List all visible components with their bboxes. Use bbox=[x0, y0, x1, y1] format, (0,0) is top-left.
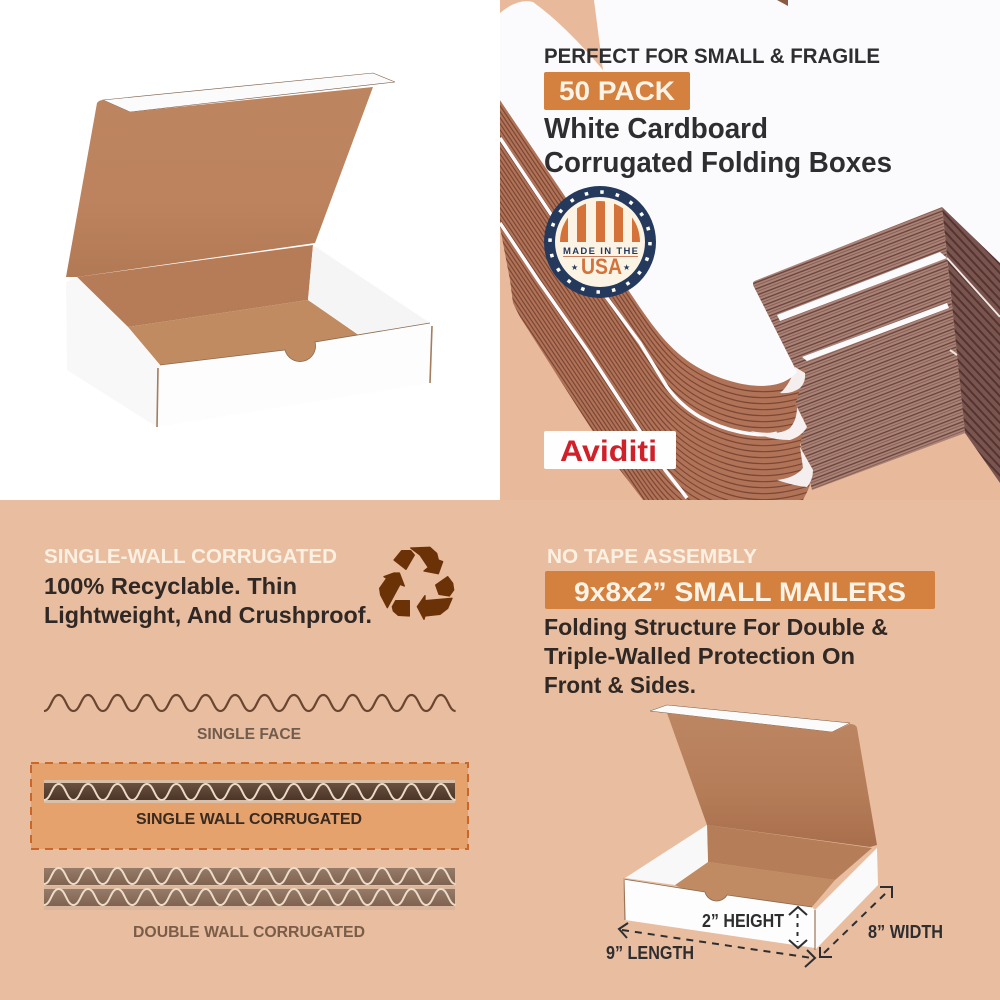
heading: perfect for small and fragile: PERFECT FOR SMALL & FRAGILE bbox=[544, 45, 880, 68]
image: open white mailer box bbox=[66, 73, 433, 427]
heading: no tape assembly: NO TAPE ASSEMBLY bbox=[547, 546, 758, 568]
diagram: single face wave bbox=[44, 695, 456, 711]
diagram: double wall cross-section bbox=[44, 868, 456, 910]
callout: single wall corrugated highlight bbox=[31, 763, 468, 849]
logo: aviditi: Aviditi bbox=[560, 435, 657, 468]
text: folding structure description: Front & Sides. bbox=[544, 672, 696, 698]
text: recyclable description: Lightweight, And Crushproof. bbox=[44, 602, 372, 628]
icon: recycle bbox=[380, 547, 454, 619]
title: white cardboard corrugated folding boxes bbox=[544, 113, 892, 179]
text: recyclable description: 100% Recyclable. Thin bbox=[44, 573, 297, 599]
text: recyclable description bbox=[44, 573, 372, 628]
panel: single wall corrugated bbox=[0, 500, 500, 1000]
icon: made in the usa seal bbox=[544, 186, 656, 298]
panel: product photo top left bbox=[0, 0, 500, 500]
arrow: length bbox=[619, 923, 815, 967]
panel: stacked boxes top right bbox=[500, 0, 1000, 500]
icon: made in the usa seal: ★ bbox=[571, 263, 578, 272]
label: single wall corrugated: SINGLE WALL CORRUGATED bbox=[136, 811, 362, 828]
banner: small mailers size: 9x8x2” SMALL MAILERS bbox=[574, 577, 906, 607]
label: width: 8” WIDTH bbox=[868, 922, 943, 942]
image: top white sheet bbox=[500, 60, 797, 386]
image: open box with dimensions bbox=[623, 705, 878, 950]
diagram: single wall cross-section bbox=[44, 780, 456, 803]
icon: made in the usa seal: ★ bbox=[623, 263, 630, 272]
logo: aviditi bbox=[544, 431, 676, 469]
panel: size details bbox=[500, 500, 1000, 1000]
text: folding structure description: Folding Structure For Double & bbox=[544, 614, 888, 640]
badge: 50 pack bbox=[544, 72, 690, 110]
label: double wall corrugated: DOUBLE WALL CORRUGATED bbox=[133, 924, 365, 941]
image: stack left side bbox=[500, 100, 814, 500]
text: folding structure description bbox=[544, 614, 888, 698]
badge: 50 pack: 50 PACK bbox=[559, 76, 676, 106]
label: single face: SINGLE FACE bbox=[197, 726, 301, 743]
title: white cardboard corrugated folding boxes: Corrugated Folding Boxes bbox=[544, 147, 892, 179]
banner: small mailers size bbox=[545, 571, 935, 609]
label: height: 2” HEIGHT bbox=[702, 911, 784, 931]
arrow: height bbox=[789, 907, 807, 948]
text: folding structure description: Triple-Walled Protection On bbox=[544, 643, 855, 669]
image: stack right side bbox=[752, 207, 1000, 490]
heading: single-wall corrugated: SINGLE-WALL CORRUGATED bbox=[44, 546, 337, 568]
icon: made in the usa seal: MADE IN THE bbox=[563, 246, 638, 257]
icon: made in the usa seal: USA bbox=[581, 254, 622, 279]
title: white cardboard corrugated folding boxes: White Cardboard bbox=[544, 113, 768, 145]
arrow: width bbox=[820, 887, 892, 957]
label: length: 9” LENGTH bbox=[606, 943, 694, 963]
